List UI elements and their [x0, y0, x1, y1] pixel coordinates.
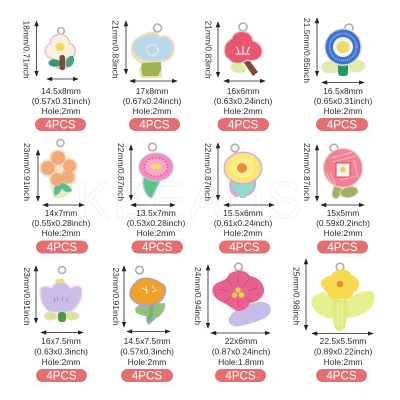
dimension arrows	[218, 143, 274, 205]
size text: Hole:2mm	[224, 228, 262, 238]
size text: (0.59x0.2inch)	[316, 218, 370, 228]
icon: lavender tulip charm	[40, 266, 82, 322]
height label: 21.5mm/0.85inch	[302, 18, 312, 83]
dimension arrows	[126, 21, 177, 81]
icon: orange flower charm	[39, 140, 78, 198]
size text: 14x7mm	[45, 208, 77, 218]
icon: pink quilted flower charm	[324, 144, 362, 200]
icon: blue flower charm	[131, 24, 175, 78]
size text: Hole:2mm	[128, 357, 166, 367]
size text: (0.53x0.28inch)	[127, 218, 185, 228]
dimension arrows	[36, 266, 83, 332]
dimension arrows	[306, 259, 373, 334]
icon: blue sunflower charm	[322, 24, 365, 76]
quantity pill: 4PCS	[139, 118, 170, 132]
size text: Hole:2mm	[133, 106, 171, 116]
size text: (0.55x0.28inch)	[32, 218, 90, 228]
size text: (0.63x0.3inch)	[34, 346, 88, 356]
quantity pill: 4PCS	[327, 118, 357, 132]
dimension arrows	[36, 21, 78, 79]
quantity pill: 4PCS	[326, 370, 357, 382]
watermark: KBEADS	[76, 172, 304, 230]
height label: 21mm/0.83inch	[110, 20, 120, 79]
icon: pink round flower charm	[139, 143, 173, 198]
product 7	[203, 143, 274, 254]
product 9	[22, 266, 88, 382]
size text: (0.61x0.24inch)	[214, 218, 272, 228]
size text	[214, 208, 272, 238]
icon: red flower charm	[224, 23, 262, 76]
product 5	[22, 140, 90, 254]
quantity pill: 4PCS	[225, 370, 256, 382]
size text: 14.5x8mm	[41, 86, 81, 96]
product 2	[110, 20, 181, 132]
quantity pill: 4PCS	[228, 118, 259, 132]
size text: Hole:2mm	[42, 106, 80, 116]
product 12	[292, 259, 375, 382]
size text	[127, 208, 185, 238]
size text	[214, 86, 272, 116]
dimension arrows	[124, 266, 170, 332]
product 1	[22, 20, 90, 132]
size text: Hole:2mm	[324, 106, 362, 116]
size text	[314, 86, 372, 116]
product 11	[193, 263, 271, 382]
size text: 22x6mm	[225, 336, 257, 346]
size text: Hole:1.8mm	[218, 357, 264, 367]
quantity pill: 4PCS	[142, 241, 173, 254]
quantity pill: 4PCS	[47, 241, 77, 254]
size text	[212, 336, 270, 367]
size text: 16.5x8mm	[323, 86, 363, 96]
product 8	[302, 143, 370, 254]
size text	[316, 208, 370, 238]
quantity pill: 4PCS	[45, 118, 76, 132]
size text: Hole:2mm	[324, 228, 362, 238]
size text: (0.87x0.24inch)	[212, 346, 270, 356]
size text	[123, 86, 181, 116]
size text: 13.5x7mm	[136, 208, 176, 218]
size text	[34, 336, 88, 367]
icon: orange tulip charm	[130, 266, 166, 325]
size text	[120, 336, 174, 367]
product 10	[111, 266, 174, 382]
size text: 15.5x6mm	[223, 208, 263, 218]
size text: (0.57x0.31inch)	[32, 96, 90, 106]
quantity pill: 4PCS	[327, 241, 358, 254]
size text: Hole:2mm	[42, 228, 80, 238]
size text: 22.5x5.5mm	[320, 336, 366, 346]
size text: Hole:2mm	[324, 357, 362, 367]
size text: 16x7.5mm	[41, 336, 81, 346]
size text: Hole:2mm	[224, 106, 262, 116]
height label: 23mm/0.91inch	[22, 267, 32, 326]
height label: 22mm/0.87inch	[302, 143, 312, 201]
size text: (0.65x0.31inch)	[314, 96, 372, 106]
height label: 24mm/0.94inch	[193, 267, 203, 325]
height label: 18mm/0.71inch	[22, 20, 32, 79]
dimension arrows	[131, 145, 175, 205]
size text: 14.5x7.5mm	[124, 336, 170, 346]
height label: 23mm/0.91inch	[22, 143, 32, 201]
size text: (0.67x0.24inch)	[123, 96, 181, 106]
icon: white flower charm	[44, 28, 76, 71]
dimension arrows	[208, 265, 270, 333]
height label: 25mm/0.98inch	[292, 267, 302, 325]
quantity pill: 4PCS	[132, 370, 162, 382]
dimension arrows	[218, 22, 265, 81]
dimension arrows	[38, 150, 84, 205]
size text: (0.63x0.24inch)	[214, 96, 272, 106]
size text: (0.57x0.3inch)	[120, 346, 174, 356]
dimension arrows	[317, 145, 364, 205]
height label: 22mm/0.87inch	[116, 143, 126, 201]
quantity pill: 4PCS	[46, 370, 77, 382]
size text: 15x5mm	[327, 208, 359, 218]
icon: yellow sunflower charm	[224, 144, 262, 198]
height label: 23mm/0.91inch	[111, 267, 121, 326]
height label: 21mm/0.83inch	[204, 20, 214, 79]
size text	[32, 208, 90, 238]
size text	[32, 86, 90, 116]
size text: 17x8mm	[136, 86, 168, 96]
size text: Hole:2mm	[42, 357, 80, 367]
product 6	[116, 143, 185, 254]
size text: 16x6mm	[227, 86, 259, 96]
icon: pink petal charm	[212, 263, 271, 326]
product 4	[302, 18, 372, 132]
height label: 22mm/0.87inch	[203, 143, 213, 201]
size text: Hole:2mm	[137, 228, 175, 238]
product 3	[204, 20, 272, 132]
size text: (0.89x0.22inch)	[314, 346, 372, 356]
quantity pill: 4PCS	[229, 241, 260, 254]
icon: yellow flower with pale leaves charm	[311, 263, 375, 331]
dimension arrows	[317, 18, 364, 82]
size text	[314, 336, 372, 367]
